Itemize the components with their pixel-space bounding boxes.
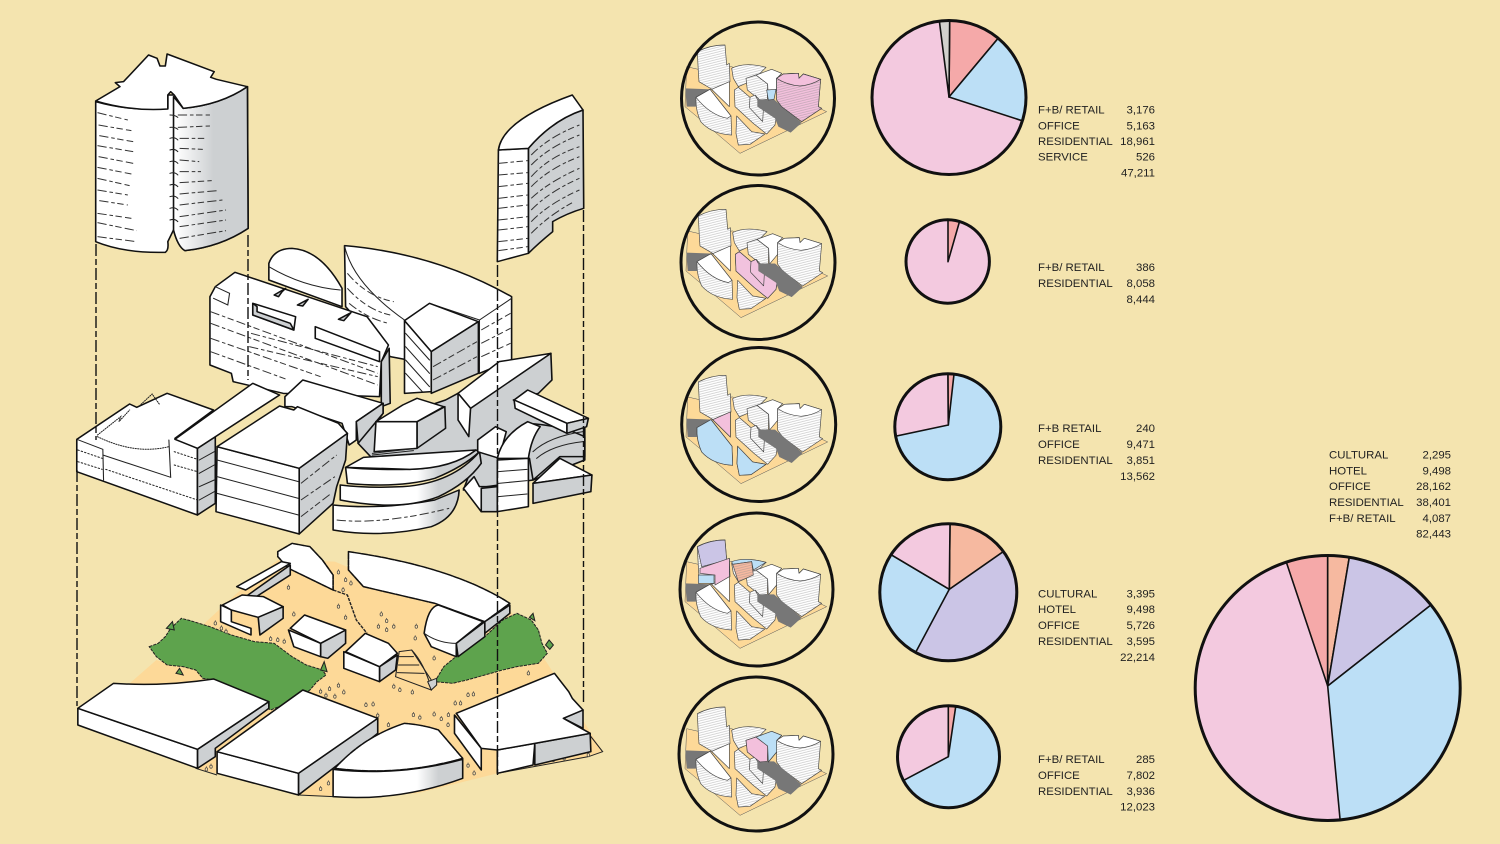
table 5: 3,936 — [1126, 786, 1155, 798]
ring — [682, 22, 834, 175]
long slab block — [210, 272, 390, 407]
total table — [1329, 450, 1451, 540]
gray service volume — [358, 353, 585, 490]
sail roof — [348, 552, 510, 622]
small block two — [288, 615, 346, 658]
table 4: 3,595 — [1126, 636, 1155, 648]
front slab one — [78, 679, 269, 768]
stepped curved podium — [333, 450, 481, 533]
tower two roof — [498, 95, 583, 150]
back ridge block — [278, 543, 333, 590]
table 1: OFFICE — [1038, 120, 1080, 132]
table 5: 285 — [1136, 754, 1155, 766]
total table: OFFICE — [1329, 481, 1371, 493]
large cube block — [216, 406, 347, 534]
table 2: RESIDENTIAL — [1038, 278, 1113, 290]
table 2 — [1038, 262, 1155, 306]
table 3: 240 — [1136, 423, 1155, 435]
table 3: 9,471 — [1126, 439, 1155, 451]
long roof block — [175, 383, 280, 448]
table 1 — [1038, 105, 1155, 179]
ground edge — [196, 733, 603, 797]
total table: 9,498 — [1422, 466, 1451, 478]
left block — [77, 393, 215, 515]
scene with cultural hotel office blocks highlighted — [685, 540, 827, 648]
connector block — [463, 427, 506, 512]
small block three — [344, 633, 397, 682]
hex roof block — [372, 398, 446, 455]
green area right — [435, 613, 547, 683]
front right block — [454, 673, 591, 773]
tower body — [96, 87, 248, 252]
cross bar block — [514, 390, 588, 433]
ring — [682, 348, 836, 502]
tower floor lines — [97, 113, 226, 242]
table 5: 12,023 — [1120, 802, 1155, 814]
total table: 82,443 — [1416, 528, 1451, 540]
tower shaded face — [174, 87, 248, 251]
stairs — [396, 650, 437, 690]
total table: 38,401 — [1416, 497, 1451, 509]
scene with office and residential block highlighted — [685, 707, 827, 815]
tower one — [96, 54, 248, 252]
table 1: F+B/ RETAIL — [1038, 105, 1105, 117]
inset map 1 — [682, 22, 834, 175]
total table: 28,162 — [1416, 481, 1451, 493]
sail-shaped block — [345, 246, 512, 373]
inset map 2 — [681, 186, 835, 340]
scene with row blocks highlighted — [686, 209, 828, 318]
table 4: OFFICE — [1038, 620, 1080, 632]
table 3: RESIDENTIAL — [1038, 455, 1113, 467]
tower two floor lines — [498, 125, 579, 251]
rounded block — [424, 605, 510, 657]
table 4: 3,395 — [1126, 588, 1155, 600]
upper block — [285, 380, 383, 445]
table 1: 18,961 — [1120, 136, 1155, 148]
pie chart 4 — [878, 522, 1018, 662]
sand ground — [128, 560, 603, 797]
table 5: OFFICE — [1038, 770, 1080, 782]
table 1: 526 — [1136, 152, 1155, 164]
table 3: 13,562 — [1120, 471, 1155, 483]
table 1: 3,176 — [1126, 105, 1155, 117]
tower two front face — [497, 148, 528, 262]
small shrubs — [166, 613, 553, 675]
table 4: 5,726 — [1126, 620, 1155, 632]
table 2: 386 — [1136, 262, 1155, 274]
pie chart 2 — [904, 218, 991, 305]
inset map 3 — [682, 348, 836, 502]
table 4: HOTEL — [1038, 604, 1076, 616]
total pie chart — [1194, 554, 1462, 822]
total table: RESIDENTIAL — [1329, 497, 1404, 509]
total table: 4,087 — [1422, 513, 1451, 525]
table 5: RESIDENTIAL — [1038, 786, 1113, 798]
table 3: OFFICE — [1038, 439, 1080, 451]
table 2: F+B/ RETAIL — [1038, 262, 1105, 274]
upper stacked building massing — [210, 246, 512, 407]
table 1: RESIDENTIAL — [1038, 136, 1113, 148]
ring — [679, 677, 833, 831]
scene with office blocks highlighted — [686, 375, 828, 484]
curved back block — [269, 248, 342, 307]
dashed projection lines — [77, 210, 584, 775]
ridge line — [333, 590, 367, 633]
paving trees — [205, 569, 590, 791]
small block one — [221, 595, 283, 635]
arched block — [497, 422, 592, 512]
table 4: 9,498 — [1126, 604, 1155, 616]
tower two — [497, 95, 584, 262]
inset map 5 — [679, 677, 833, 831]
green area left — [149, 618, 326, 710]
front arc block — [333, 723, 463, 798]
pie chart 1 — [870, 19, 1028, 176]
table 4: RESIDENTIAL — [1038, 636, 1113, 648]
ground level plan — [78, 543, 603, 798]
back slab — [237, 562, 290, 597]
table 2: 8,444 — [1126, 294, 1155, 306]
scene with residential tower highlighted — [685, 45, 827, 153]
table 3: F+B RETAIL — [1038, 423, 1101, 435]
ring — [680, 513, 833, 666]
ring — [681, 186, 835, 340]
pie chart 3 — [893, 372, 1002, 482]
table 5 — [1038, 754, 1155, 814]
table 4: 22,214 — [1120, 652, 1155, 664]
total table: HOTEL — [1329, 466, 1367, 478]
total table: F+B/ RETAIL — [1329, 513, 1396, 525]
tower two shaded face — [528, 110, 584, 253]
lower podium massing — [77, 353, 592, 534]
central cube block — [405, 303, 478, 393]
table 5: 7,802 — [1126, 770, 1155, 782]
table 4 — [1038, 588, 1155, 664]
table 3 — [1038, 423, 1155, 483]
table 4: CULTURAL — [1038, 588, 1097, 600]
pie chart 5 — [896, 704, 1001, 810]
table 1: 47,211 — [1121, 167, 1155, 179]
total table: 2,295 — [1422, 450, 1451, 462]
tower roof — [96, 54, 247, 110]
total table: CULTURAL — [1329, 450, 1388, 462]
table 3: 3,851 — [1126, 455, 1155, 467]
table 1: 5,163 — [1126, 120, 1155, 132]
inset map 4 — [680, 513, 833, 666]
gray wing — [458, 353, 551, 437]
table 1: SERVICE — [1038, 152, 1088, 164]
table 2: 8,058 — [1126, 278, 1155, 290]
table 5: F+B/ RETAIL — [1038, 754, 1105, 766]
front slab two — [217, 690, 378, 795]
